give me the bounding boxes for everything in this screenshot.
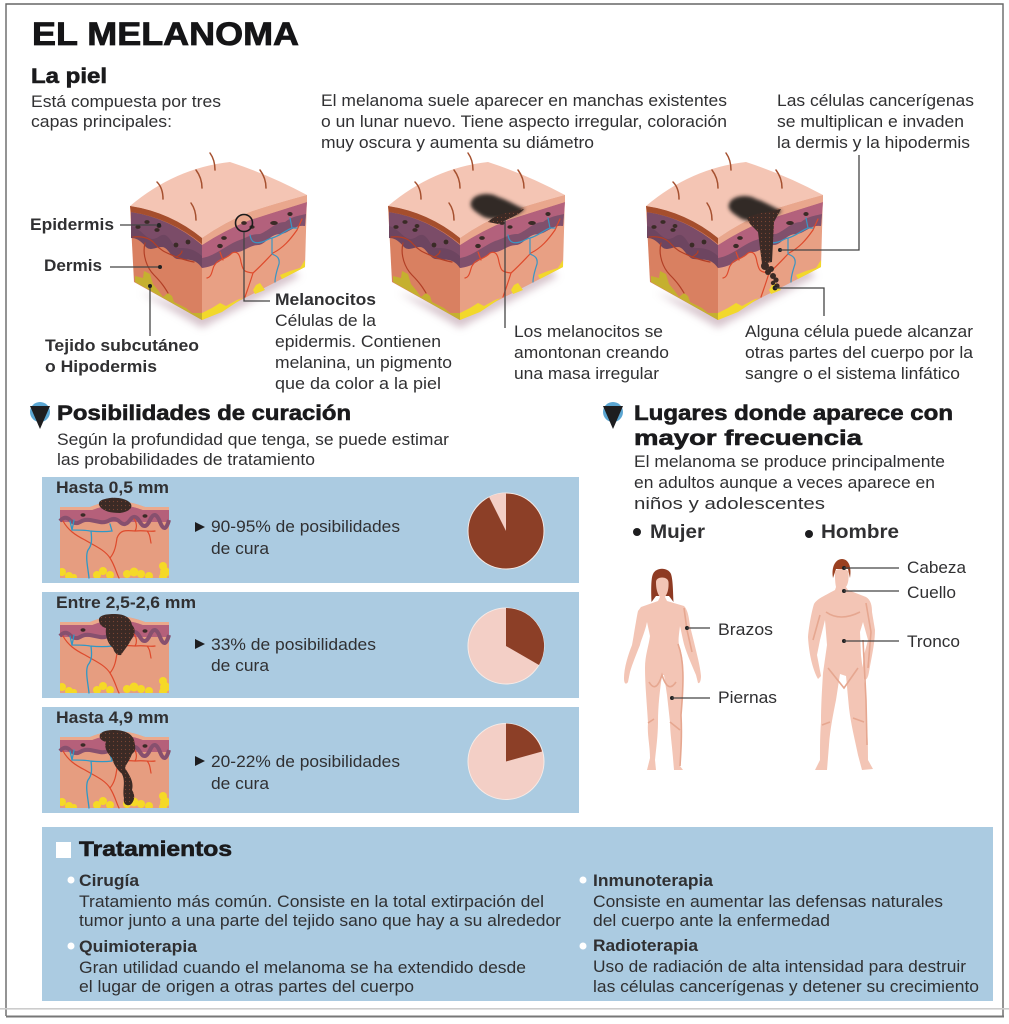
- text: lugares intro: niños y adolescentes: [634, 494, 825, 513]
- label: melanocitos: [236, 214, 452, 393]
- text: invasion intro: la dermis y la hipodermis: [777, 133, 970, 152]
- label: melanocitos: melanina, un pigmento: [275, 353, 452, 372]
- icon: pin: [30, 402, 50, 429]
- item: cirugia: Tratamiento más común. Consiste en la total extirpación del: [79, 892, 544, 911]
- text: invasion intro: Las células cancerígenas: [777, 91, 974, 110]
- panel: hasta 4,9 mm: 20-22% de posibilidades: [211, 752, 400, 771]
- text: posibilidades intro: las probabilidades de tratamiento: [57, 450, 315, 469]
- label: hipodermis: Tejido subcutáneo: [45, 336, 199, 355]
- panel: entre 2,5-2,6 mm: [42, 592, 579, 698]
- icon: square: [56, 842, 71, 858]
- item: cirugia: [68, 871, 561, 930]
- label: dermis: [44, 256, 162, 275]
- section: lugares: [603, 402, 967, 770]
- skin block: healthy: [130, 153, 307, 328]
- label: melanocitos: epidermis. Contienen: [275, 332, 441, 351]
- label: piernas: [670, 688, 777, 707]
- label: brazos: Brazos: [718, 620, 773, 639]
- item: quimioterapia: [68, 937, 526, 996]
- label: alguna celula: sangre o el sistema linfático: [745, 364, 960, 383]
- panel: entre 2,5-2,6 mm: de cura: [211, 656, 270, 675]
- text: melanoma intro: [321, 91, 727, 152]
- title: EL MELANOMA: [32, 16, 299, 52]
- label: piernas: Piernas: [718, 688, 777, 707]
- text: invasion intro: se multiplican e invaden: [777, 112, 964, 131]
- panel: hasta 0,5 mm: Hasta 0,5 mm: [56, 479, 169, 497]
- item: cirugia: tumor junto a una parte del tejido sano que hay a su alrededor: [79, 911, 561, 930]
- item: radioterapia: [580, 936, 979, 996]
- panel: entre 2,5-2,6 mm: 33% de posibilidades: [211, 635, 376, 654]
- figure: woman: [624, 569, 701, 770]
- skin block: melanoma invading: [646, 153, 823, 328]
- text: invasion intro: [777, 91, 974, 152]
- text: melanoma intro: El melanoma suele aparecer en manchas existentes: [321, 91, 727, 110]
- item: radioterapia: las células cancerígenas y detener su crecimiento: [593, 977, 979, 996]
- heading: la piel: La piel: [31, 65, 107, 88]
- panel: hasta 4,9 mm: Hasta 4,9 mm: [56, 709, 169, 727]
- label: melanocitos: Melanocitos: [275, 290, 376, 309]
- panel: la piel: [30, 65, 974, 393]
- text: lugares intro: [634, 452, 945, 513]
- heading: lugares: [634, 402, 953, 450]
- label: hombre: Hombre: [821, 522, 899, 543]
- label: mujer: [633, 522, 706, 543]
- text: lugares intro: El melanoma se produce principalmente: [634, 452, 945, 471]
- label: hipodermis: o Hipodermis: [45, 357, 157, 376]
- panel: hasta 0,5 mm: de cura: [211, 539, 270, 558]
- label: melanocitos: Células de la: [275, 311, 377, 330]
- label: cabeza: [842, 558, 967, 577]
- label: alguna celula: Alguna célula puede alcanzar: [745, 322, 973, 341]
- panel: hasta 0,5 mm: [42, 477, 579, 583]
- panel: tratamientos: [42, 827, 993, 1001]
- section: posibilidades de curacion: [30, 402, 579, 813]
- text: capas intro: capas principales:: [31, 112, 172, 131]
- label: epidermis: Epidermis: [30, 215, 114, 234]
- heading: posibilidades: Posibilidades de curación: [57, 402, 351, 425]
- text: posibilidades intro: [57, 430, 449, 469]
- label: alguna celula: [745, 286, 974, 383]
- label: tronco: Tronco: [907, 632, 960, 651]
- item: inmunoterapia: Inmunoterapia: [593, 871, 714, 890]
- heading: lugares: mayor frecuencia: [634, 427, 862, 450]
- text: melanoma intro: muy oscura y aumenta su diámetro: [321, 133, 594, 152]
- label: masa irregular: amontonan creando: [514, 343, 669, 362]
- label: melanocitos: que da color a la piel: [275, 374, 441, 393]
- label: hipodermis: [45, 284, 199, 376]
- item: radioterapia: Uso de radiación de alta intensidad para destruir: [593, 957, 966, 976]
- figure: man: [808, 559, 875, 770]
- heading: lugares: Lugares donde aparece con: [634, 402, 953, 425]
- panel: hasta 0,5 mm: 90-95% de posibilidades: [211, 517, 400, 536]
- arrow: invasion: [778, 155, 859, 252]
- heading: tratamientos: Tratamientos: [79, 838, 232, 861]
- text: melanoma intro: o un lunar nuevo. Tiene aspecto irregular, coloración: [321, 112, 727, 131]
- panel: hasta 4,9 mm: de cura: [211, 774, 270, 793]
- item: inmunoterapia: del cuerpo ante la enfermedad: [593, 911, 830, 930]
- item: quimioterapia: el lugar de origen a otras partes del cuerpo: [79, 977, 414, 996]
- label: masa irregular: Los melanocitos se: [514, 322, 663, 341]
- item: radioterapia: Radioterapia: [593, 936, 699, 955]
- text: capas intro: Está compuesta por tres: [31, 92, 221, 111]
- text: posibilidades intro: Según la profundidad que tenga, se puede estimar: [57, 430, 449, 449]
- item: inmunoterapia: Consiste en aumentar las defensas naturales: [593, 892, 943, 911]
- item: quimioterapia: Quimioterapia: [79, 937, 198, 956]
- label: brazos: [685, 620, 773, 639]
- label: mujer: Mujer: [650, 522, 706, 543]
- skin block: melanoma surface: [388, 153, 565, 328]
- label: alguna celula: otras partes del cuerpo por la: [745, 343, 974, 362]
- item: cirugia: Cirugía: [79, 871, 140, 890]
- item: inmunoterapia: [580, 871, 943, 930]
- label: cuello: Cuello: [907, 583, 956, 602]
- panel: hasta 4,9 mm: [42, 707, 579, 813]
- label: masa irregular: [505, 220, 669, 383]
- label: cuello: [842, 583, 956, 602]
- icon: pin: [603, 402, 623, 429]
- text: lugares intro: en adultos aunque a veces aparece en: [634, 473, 935, 492]
- label: epidermis: [30, 215, 161, 234]
- item: quimioterapia: Gran utilidad cuando el melanoma se ha extendido desde: [79, 958, 526, 977]
- panel: entre 2,5-2,6 mm: Entre 2,5-2,6 mm: [56, 594, 196, 612]
- label: cabeza: Cabeza: [907, 558, 967, 577]
- label: tronco: [842, 632, 960, 651]
- label: masa irregular: una masa irregular: [514, 364, 659, 383]
- label: dermis: Dermis: [44, 256, 102, 275]
- text: capas intro: [31, 92, 221, 131]
